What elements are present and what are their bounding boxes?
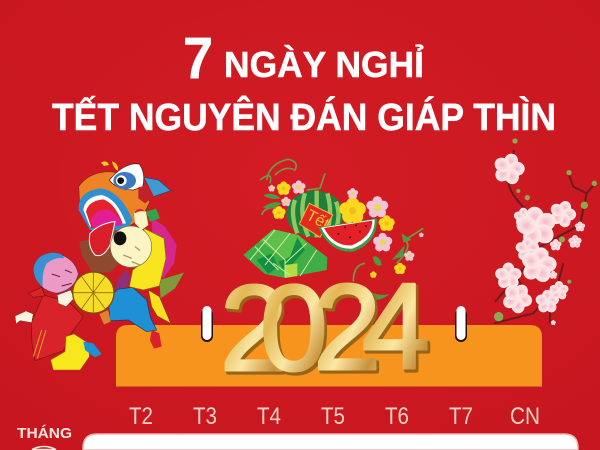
buds <box>494 138 597 321</box>
weekday labels: T3 <box>193 403 217 430</box>
small child hair <box>33 253 64 287</box>
whole watermelon <box>286 191 344 237</box>
weekday labels: CN <box>510 403 540 430</box>
title <box>52 26 556 139</box>
blue shoe <box>83 342 102 357</box>
illustration: lion dance children <box>15 161 184 370</box>
fan <box>73 272 114 313</box>
blossoms <box>488 149 586 325</box>
lion mane <box>152 217 177 278</box>
gold digits <box>220 258 430 396</box>
yellow flowers <box>272 181 406 303</box>
child face marks <box>123 247 140 265</box>
small child head <box>33 253 78 293</box>
calendar panel <box>83 434 578 450</box>
shadow digits: 4 <box>364 261 432 397</box>
binder ring left <box>201 306 213 342</box>
gold 2024 <box>220 258 432 399</box>
month badge <box>32 446 56 450</box>
red tip <box>135 209 145 213</box>
lion eye <box>109 164 144 190</box>
brown cloth <box>79 227 119 273</box>
orange foot <box>99 310 111 325</box>
pink flowers <box>268 180 424 261</box>
child hair <box>114 231 126 245</box>
watermelon slice <box>318 218 377 252</box>
green cuff <box>146 209 160 222</box>
left hand <box>15 311 33 324</box>
shadow digits <box>222 261 432 399</box>
child head large <box>110 226 152 267</box>
tassel <box>159 273 184 298</box>
yellow tuft <box>101 161 118 171</box>
weekday labels: T2 <box>129 403 153 430</box>
weekday labels <box>129 403 540 430</box>
yellow shirt <box>129 228 166 290</box>
lion head <box>79 172 150 230</box>
lion ear <box>144 177 171 197</box>
yellow tail <box>148 290 171 323</box>
title: 7 <box>183 26 213 91</box>
gold digits: 4 <box>362 258 430 394</box>
grapes <box>115 270 131 290</box>
weekday labels: T7 <box>449 403 473 430</box>
weekday labels: T5 <box>321 403 345 430</box>
robe collar tie <box>28 287 45 297</box>
weekday labels: T6 <box>385 403 409 430</box>
title: NGÀY NGHỈ <box>224 44 424 85</box>
shadow digits: 0 <box>262 263 330 399</box>
robe lines <box>33 330 46 358</box>
red greeting card <box>299 203 333 237</box>
gold digits: 2 <box>220 260 288 396</box>
binder ring right <box>455 306 467 342</box>
branches <box>494 150 595 323</box>
title: TẾT NGUYÊN ĐÁN GIÁP THÌN <box>52 95 556 139</box>
gold digits: 2 <box>313 259 381 395</box>
lion tongue <box>89 222 115 256</box>
lion mouth <box>79 188 133 230</box>
illustration: watermelon, banh chung and flowers <box>243 159 424 303</box>
red greeting card: Tết <box>303 207 332 233</box>
small child face <box>52 270 72 286</box>
shadow digits: 2 <box>222 263 290 399</box>
small child robe <box>31 295 83 361</box>
weekday labels: T4 <box>257 403 281 430</box>
yellow trousers <box>51 334 89 370</box>
lion scales <box>138 185 154 203</box>
leaves <box>263 194 412 300</box>
month label: THÁNG <box>17 425 72 442</box>
blue trousers <box>108 287 157 332</box>
calendar header bar <box>116 325 542 387</box>
banh chung <box>243 229 327 278</box>
vines <box>260 159 423 282</box>
illustration: peach blossom branch <box>488 138 597 325</box>
hand on fan <box>57 290 74 307</box>
gold digits: 0 <box>260 260 328 396</box>
shadow digits: 2 <box>315 262 383 398</box>
raised hand <box>134 210 148 230</box>
red shoe <box>150 330 162 349</box>
